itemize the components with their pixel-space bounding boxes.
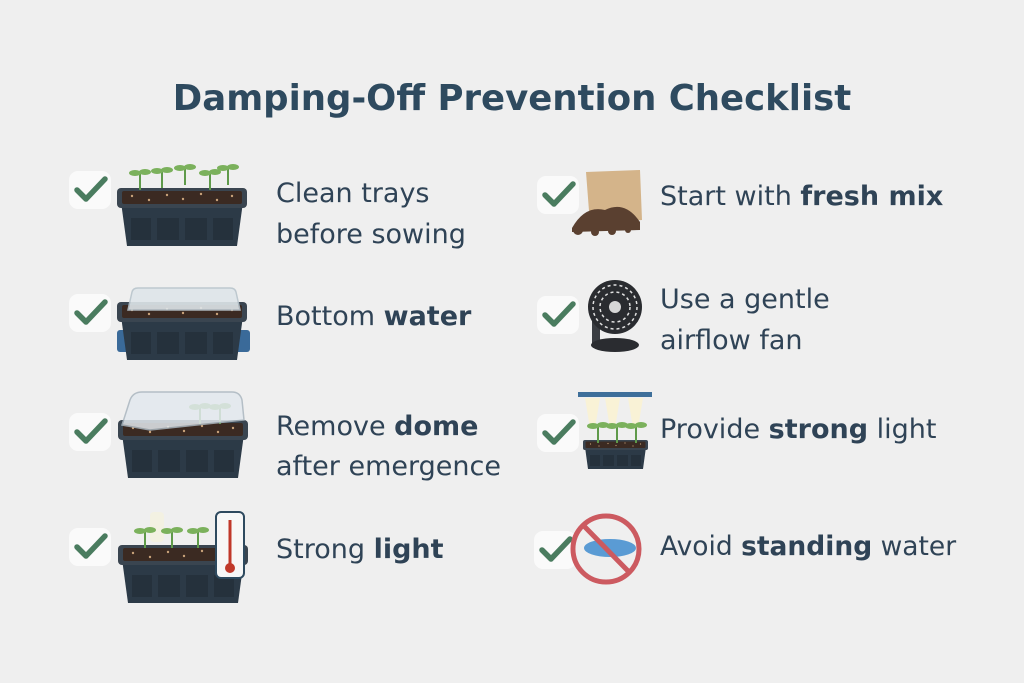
icon: check 4 (69, 528, 111, 566)
icon: no water (573, 516, 639, 582)
icon: check 1 (69, 171, 111, 209)
item: fresh mix (537, 170, 943, 236)
icon: check 2 (69, 294, 111, 332)
icon: tray with lifted dome (118, 392, 248, 478)
icon: tray with seedlings (117, 164, 247, 246)
text: airflow fan (660, 325, 803, 356)
text: remove dome: Remove dome (276, 411, 478, 442)
text: airflow fan: Use a gentle (660, 284, 830, 315)
text: fresh mix: Start with fresh mix (660, 181, 943, 212)
title: Damping-Off Prevention Checklist (173, 78, 851, 119)
icon: check 6 (537, 296, 579, 334)
icon: check 3 (69, 413, 111, 451)
icon: tray with thermometer (118, 512, 248, 603)
item: provide strong light (537, 392, 936, 469)
item: avoid standing water (534, 516, 956, 582)
icon: domed tray (117, 288, 250, 360)
item: clean trays (69, 164, 429, 246)
text: bottom water: Bottom water (276, 301, 472, 332)
icon: grow light tray (578, 392, 652, 469)
item: airflow fan (537, 280, 830, 352)
icon: check 5 (537, 176, 579, 214)
text: before sowing (276, 219, 466, 250)
icon: check 8 (534, 531, 576, 569)
icon: check 7 (537, 414, 579, 452)
text: strong light: Strong light (276, 534, 444, 565)
text: clean trays: Clean trays (276, 178, 429, 209)
text: after emergence (276, 451, 501, 482)
item: bottom water (69, 288, 472, 360)
item: strong light (69, 512, 444, 603)
item: remove dome (69, 392, 478, 478)
text: avoid standing water: Avoid standing water (660, 531, 956, 562)
icon: fan (588, 280, 642, 352)
text: provide strong light: Provide strong light (660, 414, 936, 445)
icon: soil bag (572, 170, 642, 236)
